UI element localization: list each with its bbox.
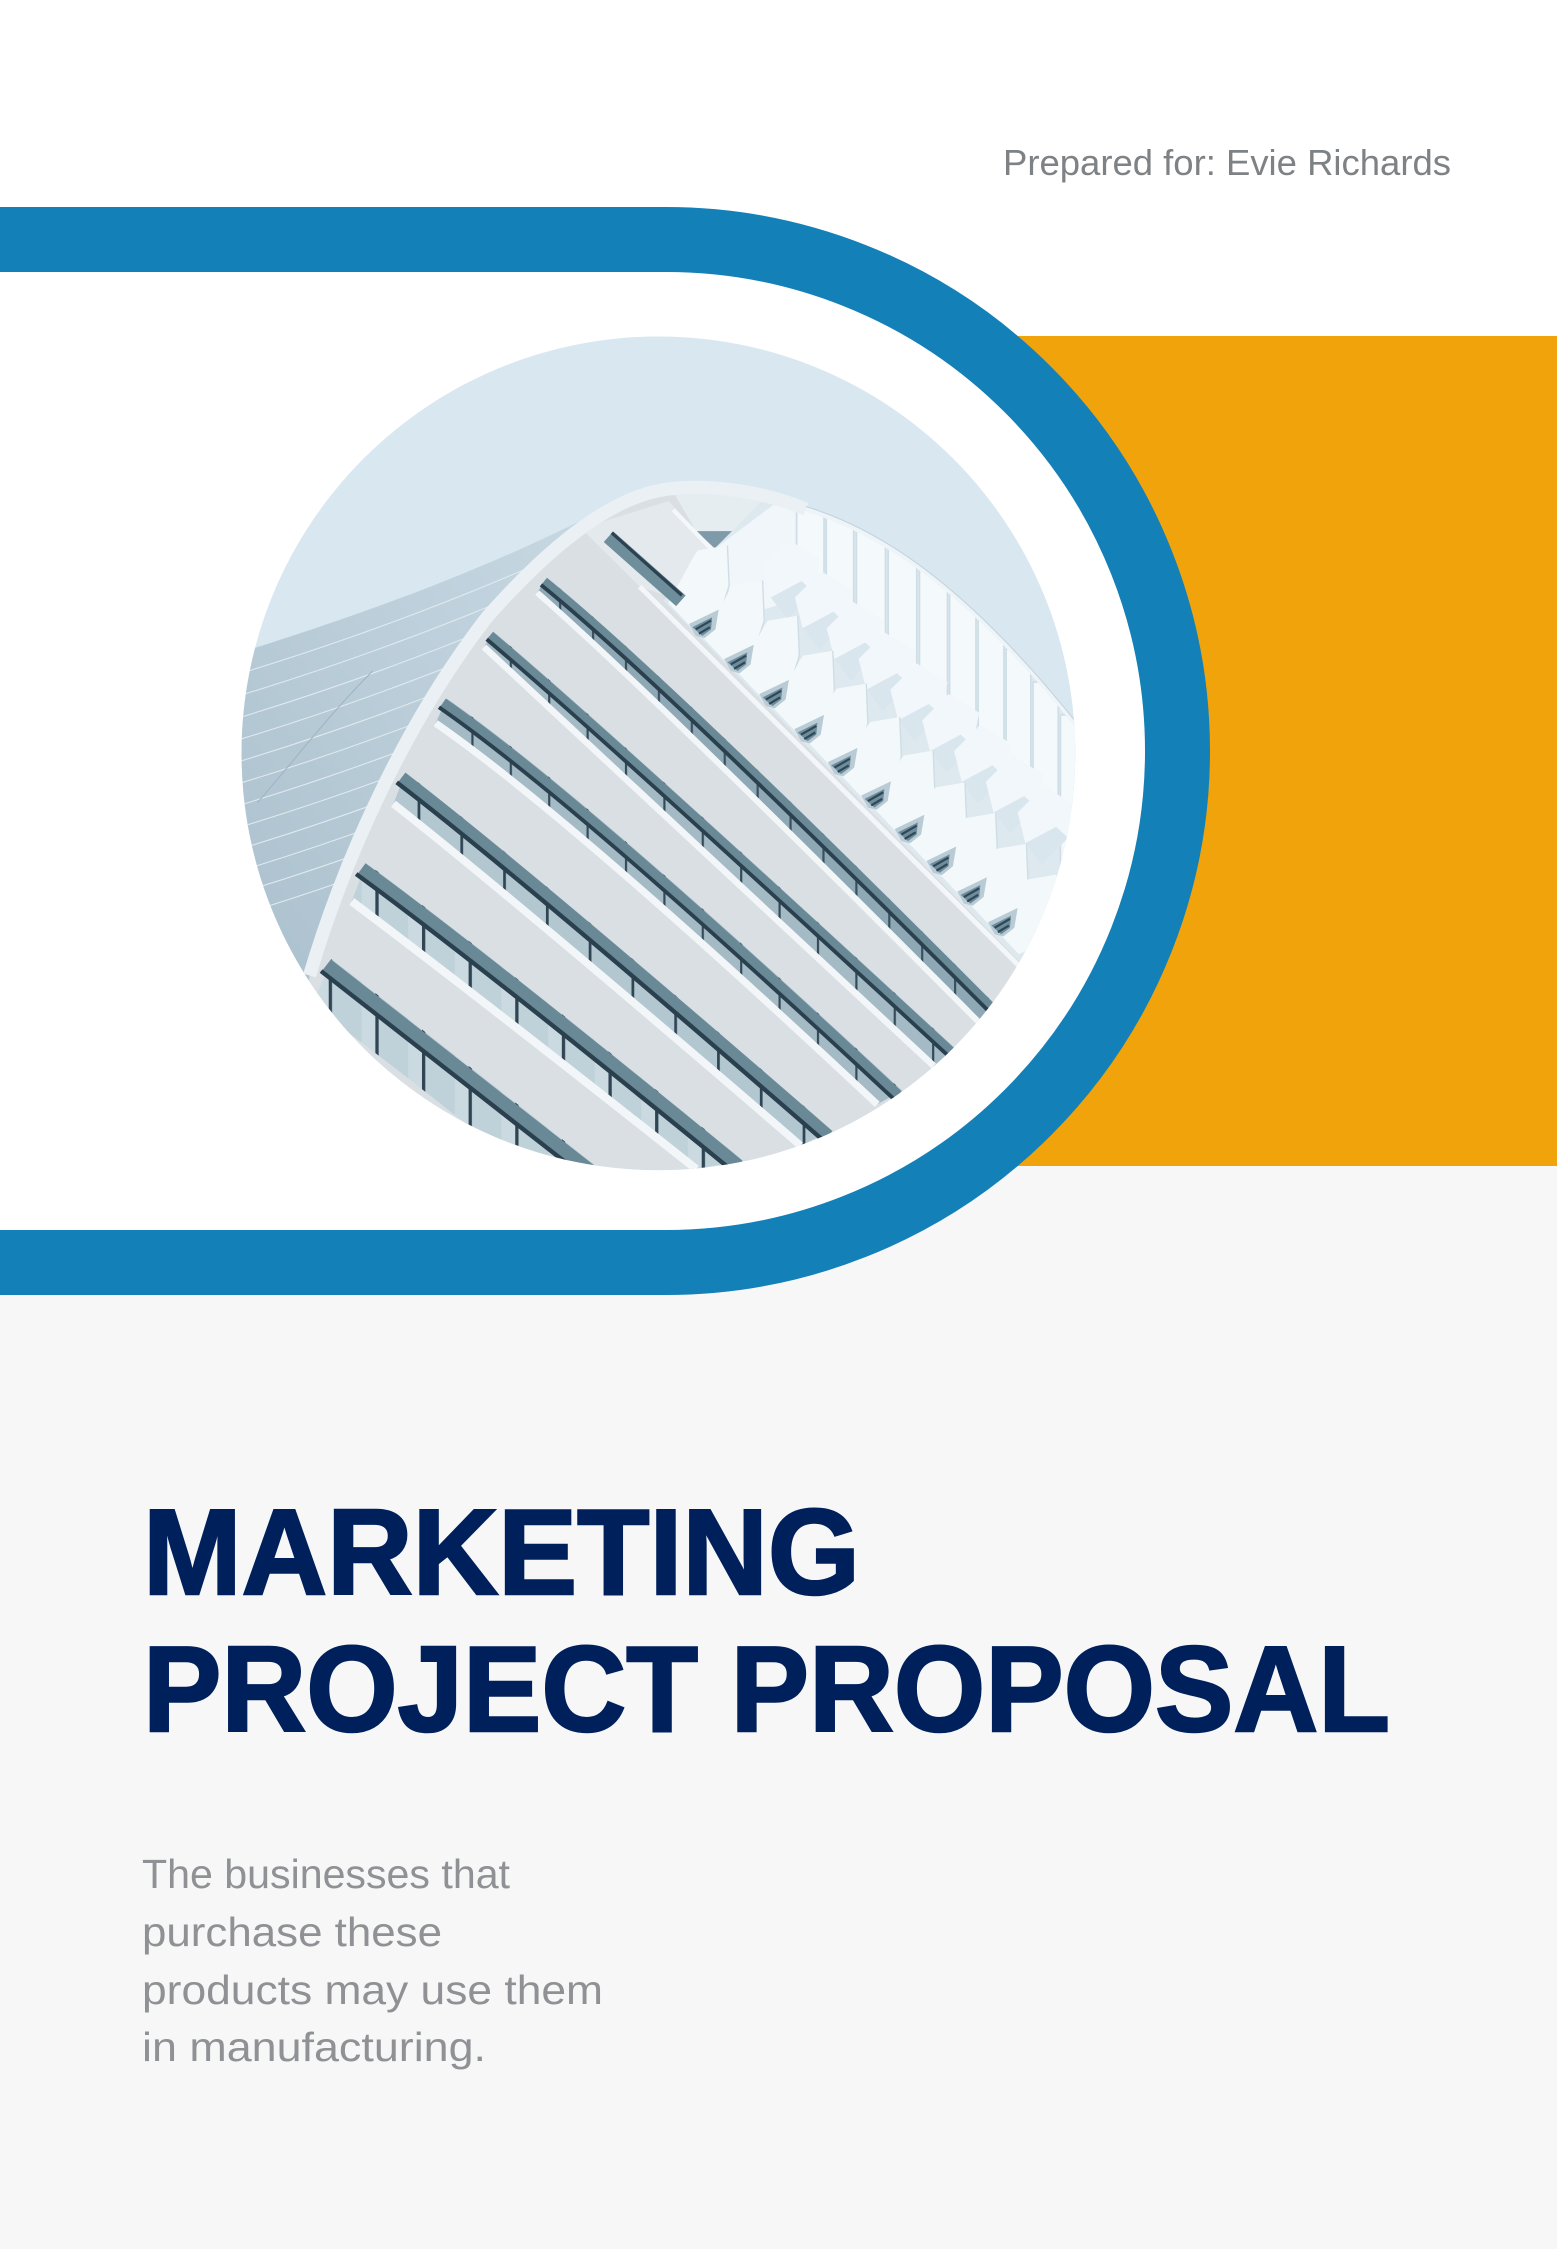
shadowed glass patches between fins <box>689 610 1018 937</box>
vertical fins <box>797 501 1086 869</box>
title: MARKETING <box>143 1484 860 1620</box>
floor 6 windows <box>352 863 743 1171</box>
floor 4 windows <box>436 698 902 1104</box>
sawtooth fins <box>668 545 1059 954</box>
curved roof with panel lines <box>242 522 578 1031</box>
facade <box>309 494 1076 1170</box>
prepared for label: Prepared for: Evie Richards <box>1003 142 1451 183</box>
sky <box>230 320 1090 1180</box>
photo: white building in circle <box>230 320 1108 1198</box>
description <box>142 1851 603 2070</box>
concrete band below fins <box>614 587 1036 1005</box>
small top window <box>697 531 732 548</box>
description: products may use them <box>142 1967 603 2013</box>
top concrete piece and underside of arch <box>586 501 708 594</box>
floor 3 windows <box>484 632 955 1066</box>
white edge below fins <box>640 587 1036 983</box>
blue rounded frame <box>0 240 1178 1262</box>
floor 5 windows <box>393 773 832 1145</box>
floor 7 windows <box>318 959 595 1166</box>
description: in manufacturing. <box>142 2024 486 2070</box>
description: The businesses that <box>142 1851 511 1897</box>
floor 2 windows <box>537 578 995 1025</box>
short top window strip <box>608 533 682 601</box>
white finned section <box>664 502 1075 961</box>
small white ledge <box>673 510 713 550</box>
title <box>143 1484 1390 1757</box>
white arched edge <box>310 487 1086 975</box>
title: PROJECT PROPOSAL <box>143 1621 1390 1757</box>
page background: lower grey panel <box>0 1166 1557 2249</box>
stepped folds <box>763 540 1075 865</box>
orange band <box>900 336 1557 1166</box>
description: purchase these <box>142 1909 442 1955</box>
